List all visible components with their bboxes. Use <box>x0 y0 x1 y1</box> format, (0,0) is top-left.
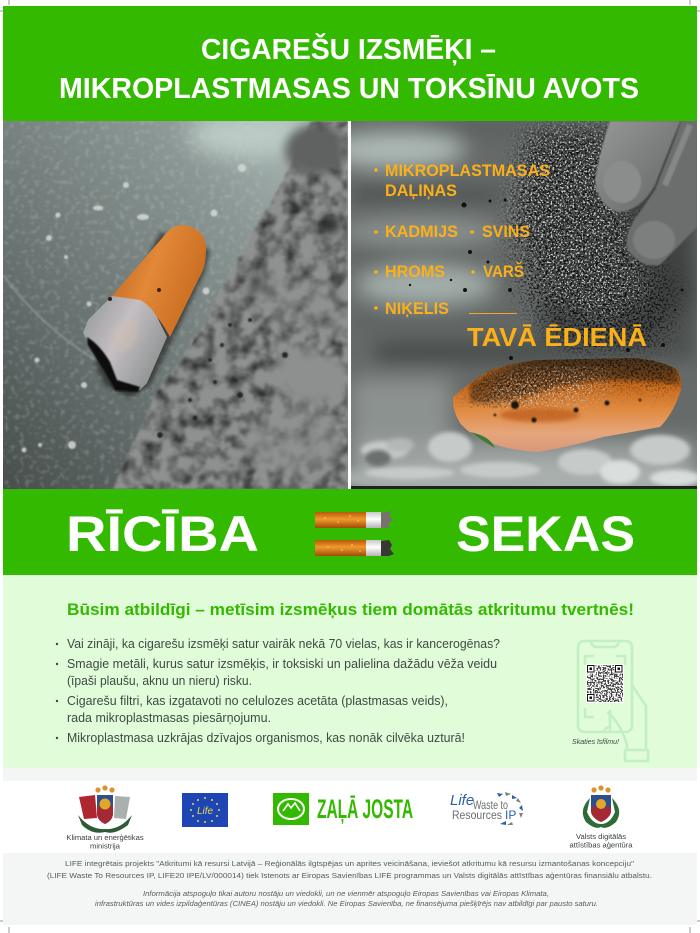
icon: phone in hand with QR code <box>572 641 648 761</box>
photo: pepper falling on food <box>325 118 700 494</box>
disclaimer: Informācija atspoguļo tikai autoru nostāju un viedokli, un ne vienmēr atspoguļo Eiropas Savienības vai Eiropas Klimata, <box>143 889 549 898</box>
bullet list: Smagie metāli, kurus satur izsmēķis, ir toksiski un palielina dažādu vēža veidu <box>67 657 497 671</box>
fingers <box>595 121 697 265</box>
logo: Climate and Energy Ministry <box>66 785 144 850</box>
panel: funding disclaimer <box>3 853 697 925</box>
logo: Life Waste to Resources IP <box>450 792 523 825</box>
logo: Climate and Energy Ministry: Klimata un enerģētikas <box>66 833 144 842</box>
bullet list: Mikroplastmasa uzkrājas dzīvajos organismos, kas nonāk cilvēka uzturā! <box>67 731 465 745</box>
logo: Life Waste to Resources IP: Resources <box>452 808 502 822</box>
logo: EU LIFE flag <box>182 793 228 827</box>
contaminants list <box>374 161 550 318</box>
contaminants list: SVINS <box>482 222 530 241</box>
panel: title header <box>3 6 697 121</box>
logo: EU LIFE flag: Life <box>197 806 213 817</box>
heading: consequence: SEKAS <box>456 506 635 562</box>
QR code <box>586 664 624 703</box>
bullet list: Vai zināji, ka cigarešu izsmēķi satur vairāk nekā 70 vielas, kas ir kancerogēnas? <box>67 637 500 651</box>
funding statement <box>47 859 652 880</box>
funding statement: LIFE integrētais projekts "Atkritumi kā resursi Latvijā – Reģionālās ilgtspējas un aprites veicināšana, ieviešot atkritumu kā resursu izmantošanas koncepciju" <box>65 859 634 868</box>
logo: Life Waste to Resources IP: Life <box>450 792 474 809</box>
disclaimer: infrastruktūras un vides izpildaģentūras (CINEA) nostāju un viedokli. Ne Eiropas Savienība, ne finansējuma piešķīrējs nav atbildīgi par pausto saturu. <box>95 899 598 908</box>
logo: Zaļā josta: ZAĻĀ JOSTA <box>317 794 413 824</box>
cigarette butt <box>83 225 210 398</box>
panel: information <box>3 575 697 768</box>
logo: Life Waste to Resources IP: Waste to <box>473 798 508 812</box>
title: MIKROPLASTMASAS UN TOKSĪNU AVOTS <box>59 73 639 105</box>
callout: in your food: TAVĀ ĒDIENĀ <box>467 322 647 352</box>
pepper cloud <box>409 125 684 364</box>
funding statement: (LIFE Waste To Resources IP, LIFE20 IPE/LV/000014) tiek īstenots ar Eiropas Savienības LIFE programmas un Valsts digitālās attīstības aģentūras finansiālu atbalstu. <box>47 871 652 880</box>
QR caption: Skaties īsfilmu! <box>572 737 620 746</box>
bullet list: rada mikroplastmasas piesārņojumu. <box>67 711 271 725</box>
bullet list <box>56 637 500 745</box>
photo: cigarette butt on pavement <box>3 113 348 489</box>
title <box>59 32 639 105</box>
bullet list: Cigarešu filtri, kas izgatavoti no celulozes acetāta (plastmasas veids), <box>67 694 448 708</box>
heading: action: RĪCĪBA <box>66 506 259 562</box>
panel: action equals consequence <box>3 489 697 575</box>
disclaimer <box>95 889 598 908</box>
contaminants list: VARŠ <box>483 262 524 281</box>
call to action heading: Būsim atbildīgi – metīsim izsmēķus tiem domātās atkritumu tvertnēs! <box>67 600 634 619</box>
contaminants list: NIĶELIS <box>385 299 449 318</box>
contaminants list: HROMS <box>385 262 445 281</box>
logo: Life Waste to Resources IP: IP <box>505 808 516 822</box>
logo: State Digital Development Agency: attīstības aģentūra <box>570 840 633 850</box>
bullet list: (īpaši plaušu, aknu un nieru) risku. <box>67 674 252 688</box>
rock curb <box>113 121 348 489</box>
contaminants list: MIKROPLASTMASAS <box>385 161 550 180</box>
icon: equals sign made of cigarette butts <box>315 511 394 556</box>
contaminants list: KADMIJS <box>385 222 458 241</box>
logo: Climate and Energy Ministry: ministrija <box>90 842 121 850</box>
salt pile <box>351 430 697 489</box>
panel: logos <box>3 768 697 853</box>
logo: State Digital Development Agency <box>570 785 633 850</box>
contaminants list: DAĻIŅAS <box>385 181 457 200</box>
logo: State Digital Development Agency: Valsts digitālās <box>576 832 626 841</box>
title: CIGAREŠU IZSMĒĶI – <box>201 32 496 66</box>
food <box>453 348 681 452</box>
logo: Zaļā josta <box>273 793 413 825</box>
